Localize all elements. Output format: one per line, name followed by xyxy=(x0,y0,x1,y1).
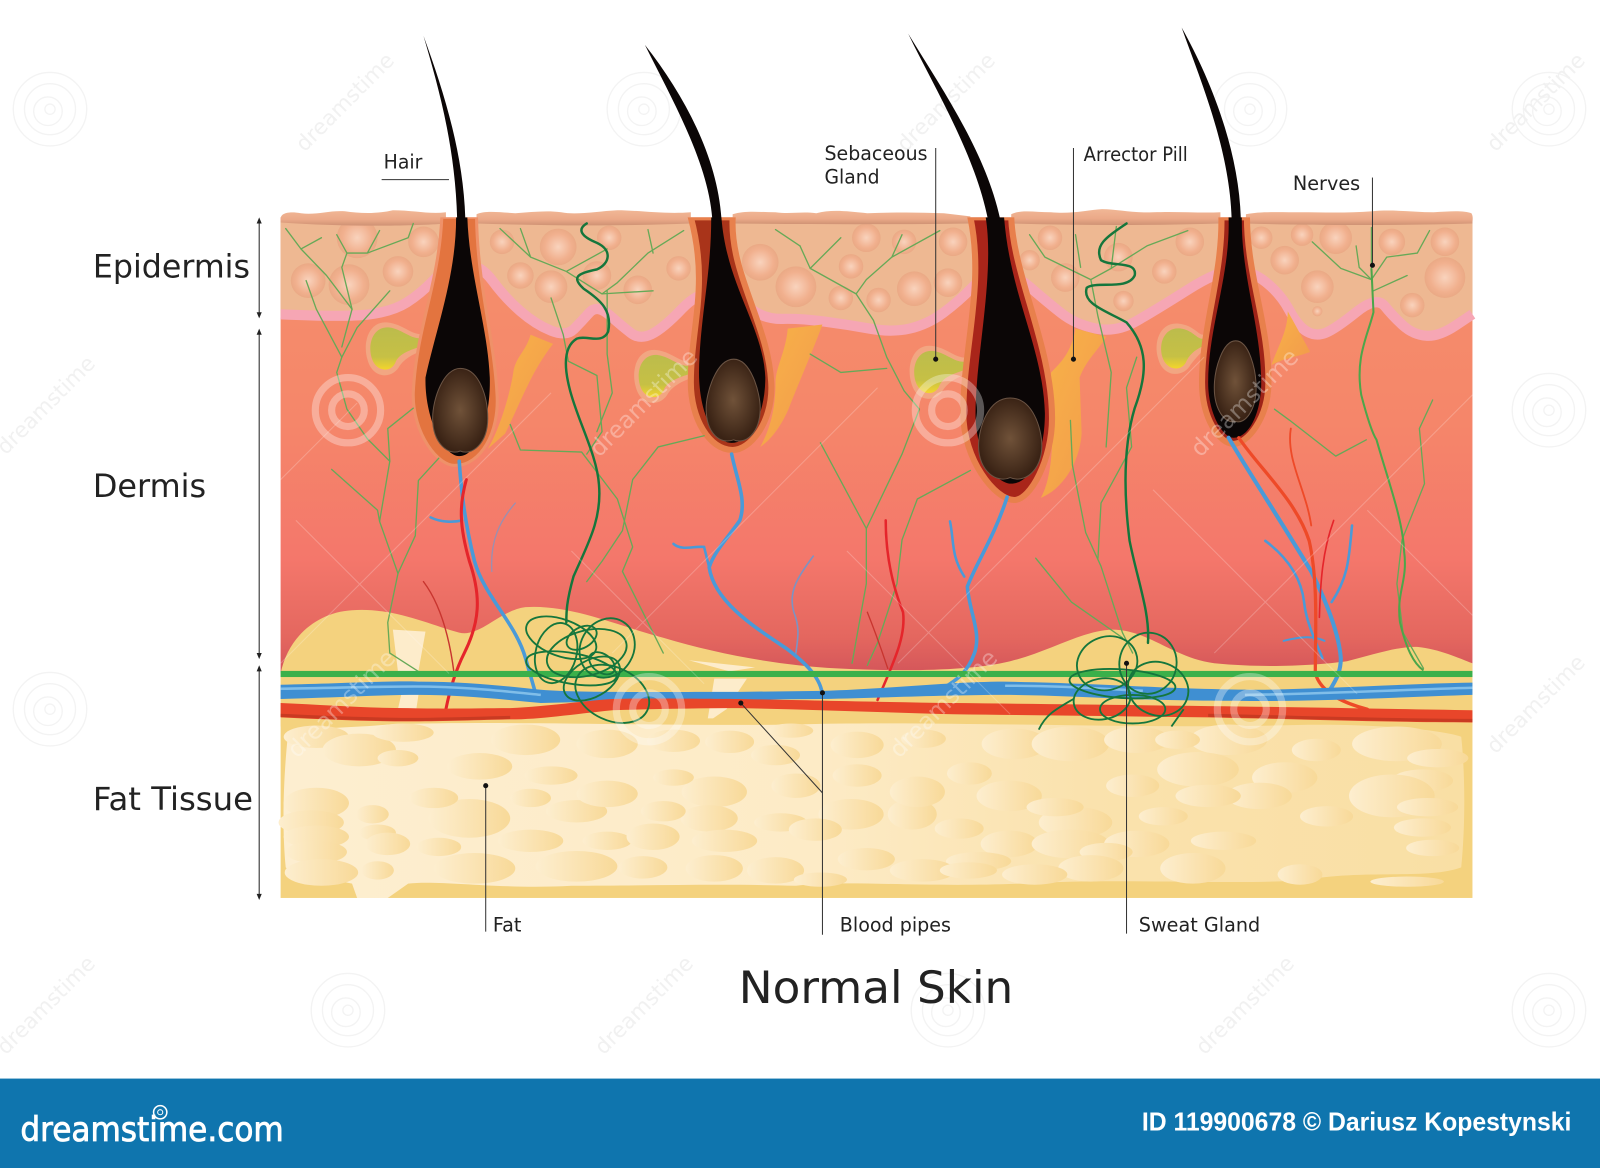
watermark: faint spirals and stock text on white: dreamstime xyxy=(1482,650,1591,759)
nerve trunk right xyxy=(1360,268,1423,670)
label: Hair: Hair xyxy=(384,150,422,173)
label: Sebaceous Gland: Gland xyxy=(824,166,880,189)
watermark: translucent spirals and text over the skin: dreamstime xyxy=(282,644,401,763)
watermark: translucent spirals and text over the skin xyxy=(282,343,1304,763)
blood vessels in dermis xyxy=(423,429,1367,709)
light green nerve network xyxy=(286,223,1433,671)
icon: sweat gland coil right xyxy=(1039,628,1196,730)
epidermal cells xyxy=(291,217,1465,317)
icons: arrector pili muscles xyxy=(488,311,1310,498)
label: Nerves: Nerves xyxy=(1293,172,1360,195)
watermark: faint spirals and stock text on white: dreamstime xyxy=(590,951,699,1060)
label: Blood pipes: Blood pipes xyxy=(840,914,951,937)
label: Arrector Pill: Arrector Pill xyxy=(1084,143,1188,166)
footer banner xyxy=(0,1079,1600,1168)
label: Sebaceous Gland: Sebaceous xyxy=(824,142,928,165)
watermark: translucent spirals and text over the skin: dreamstime xyxy=(1185,343,1304,462)
footer logo: dreamstime.com: dreamstime.com xyxy=(20,1110,284,1149)
dark green wavy nerves xyxy=(566,223,1148,643)
follicle 4 xyxy=(1202,217,1268,444)
layer range arrows xyxy=(257,217,262,900)
faint diagonal watermark lines over the skin xyxy=(281,357,1472,714)
label: Fat: Fat xyxy=(493,914,522,937)
nerve band xyxy=(281,671,1472,677)
follicle 2 xyxy=(691,217,771,450)
follicle 3 xyxy=(963,217,1052,500)
icons: sebaceous glands xyxy=(366,322,1207,403)
title: Normal Skin: Normal Skin xyxy=(739,961,1013,1014)
stratum corneum surface xyxy=(281,209,1473,226)
layer label: Epidermis: Epidermis xyxy=(93,250,250,286)
leader lines and dots xyxy=(382,148,1375,935)
highlights: pale fat patches in the hump xyxy=(393,630,755,722)
hair shafts xyxy=(423,28,1241,218)
label: Sweat Gland: Sweat Gland xyxy=(1139,914,1260,937)
watermark: translucent spirals and text over the skin: dreamstime xyxy=(584,343,703,462)
label: Sebaceous Gland xyxy=(824,142,928,189)
icon: sweat gland coil left xyxy=(520,608,659,734)
panel: hypodermis fat hump beneath dermis xyxy=(281,607,1472,727)
panel: fat tissue layer xyxy=(279,718,1472,898)
pink basal membrane band xyxy=(281,265,1472,337)
watermark: faint spirals and stock text on white: dreamstime xyxy=(291,48,400,157)
watermark: translucent spirals and text over the skin: dreamstime xyxy=(884,644,1003,763)
layer label: Fat Tissue: Fat Tissue xyxy=(93,782,253,818)
panel: epidermis layer xyxy=(281,209,1473,337)
layer label: Dermis: Dermis xyxy=(93,469,206,505)
red artery band xyxy=(281,699,1472,722)
watermark: faint spirals and stock text on white: dreamstime xyxy=(1482,48,1591,157)
panel: dermis layer xyxy=(281,217,1472,673)
blue vein band xyxy=(281,681,1472,703)
watermark: faint spirals and stock text on white: dreamstime xyxy=(892,48,1001,157)
watermark: faint spirals and stock text on white: dreamstime xyxy=(1191,951,1300,1060)
follicle 1 xyxy=(413,217,497,465)
footer credit: ID 119900678 © Dariusz Kopestynski xyxy=(1142,1109,1571,1137)
